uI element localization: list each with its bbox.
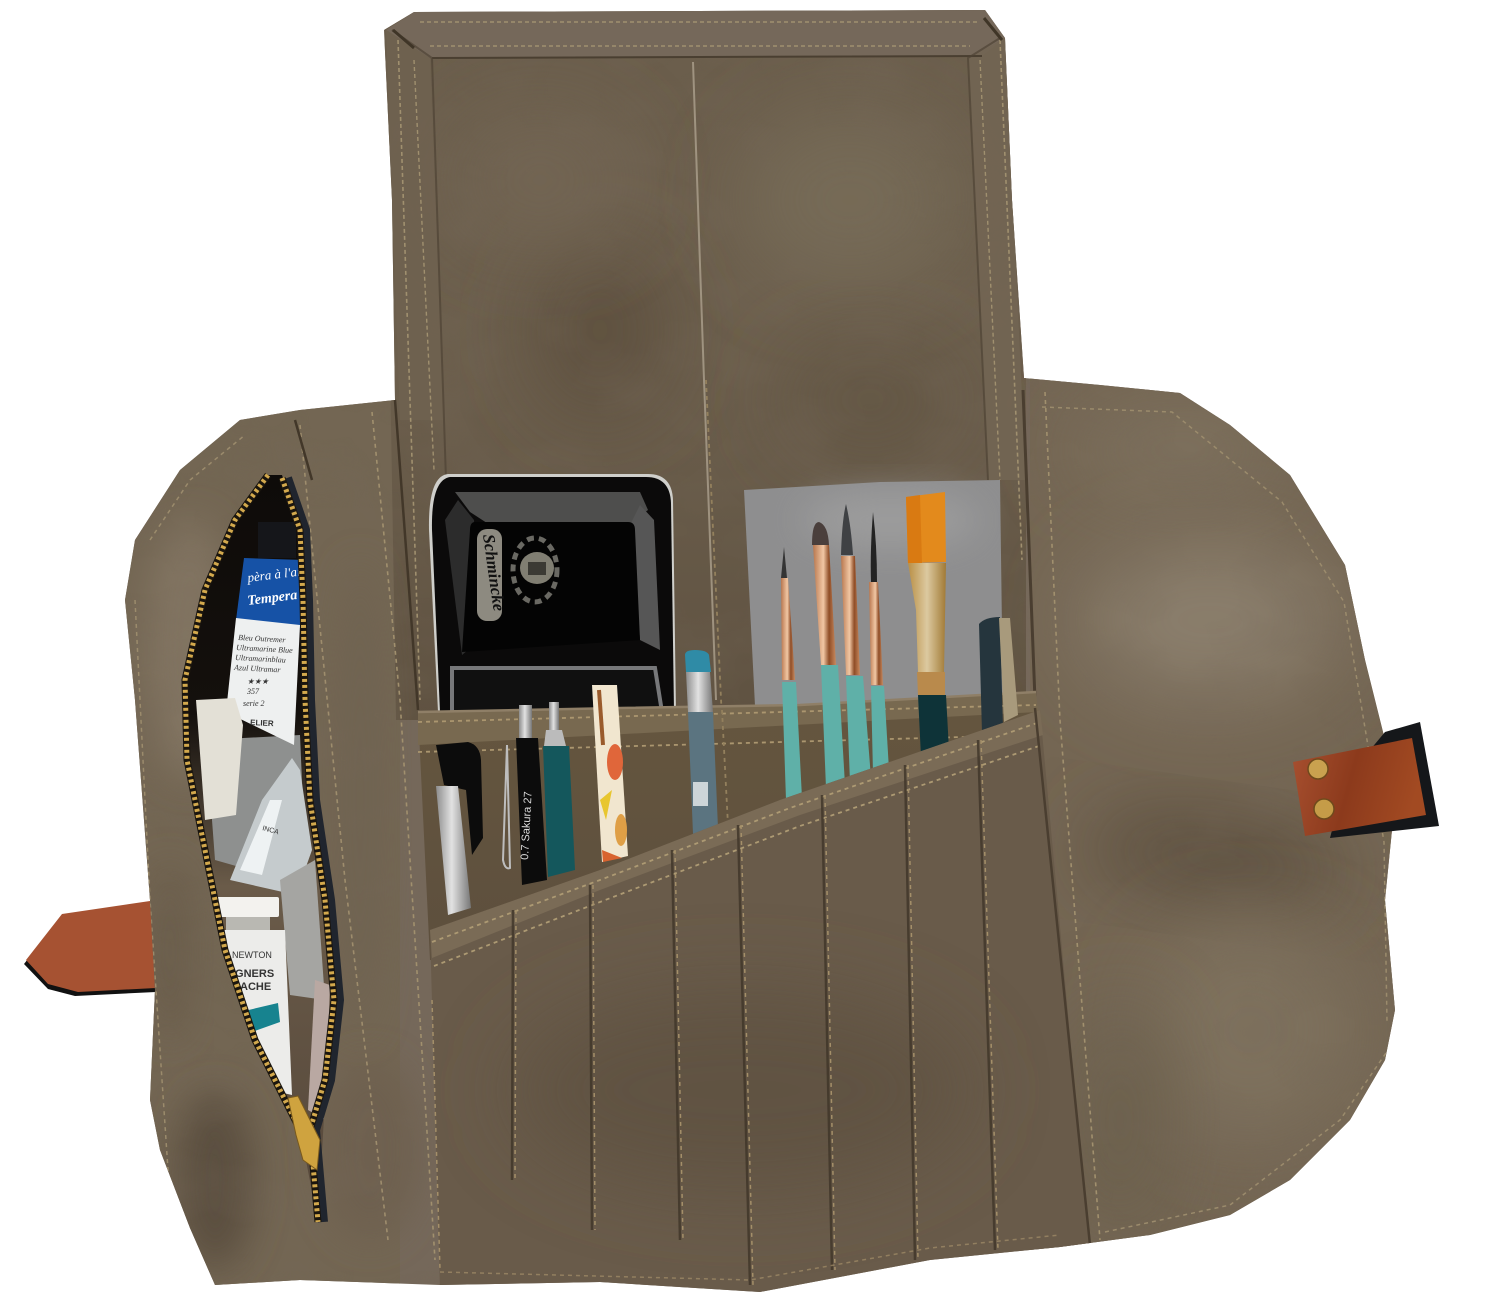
floral patterned pencil [592, 685, 628, 862]
canvas light and dark mottling [145, 110, 1360, 1270]
panel: right wing [1030, 375, 1400, 1260]
back pocket [418, 692, 1042, 960]
brush 3 [841, 504, 871, 783]
gold teeth left [185, 475, 300, 1130]
right leather strap with black backing [1293, 722, 1439, 838]
paint tube: ultramarine: Ultramarinblau [235, 653, 286, 665]
zipper pocket [185, 475, 339, 1222]
Schmincke label: Schmincke [479, 533, 509, 613]
pocket divider stitching [432, 740, 998, 1285]
bottom hem [440, 1235, 1060, 1280]
grey pencil with teal eraser [685, 650, 718, 834]
zipper teeth left [185, 475, 300, 1130]
wing seams [135, 390, 1388, 1260]
silver pen with black clip [436, 742, 483, 915]
brass rivet top [1308, 759, 1328, 779]
pocket interior [185, 475, 334, 1222]
paint tube: ultramarine: Bleu Outremer [238, 633, 287, 645]
tin lid bevel [455, 492, 648, 525]
brush 2 [812, 522, 845, 788]
sketchbook sheet [744, 480, 1003, 706]
paint tube: ultramarine: Ultramarine Blue [236, 643, 293, 655]
mechanical pencil: 0.7 Sakura 27 [519, 791, 535, 860]
paint tube: ultramarine: Tempera [247, 588, 298, 609]
paint tube: ultramarine: Azul Ultramar [233, 663, 282, 674]
left leather strap [24, 901, 156, 996]
paint tube: ultramarine: ELIER [250, 718, 274, 728]
tin crest emblem [513, 538, 557, 602]
front diagonal pocket [430, 708, 1090, 1295]
mechanical pencil [503, 705, 547, 885]
tin raised lid [462, 522, 640, 652]
pocket divider seams [512, 740, 995, 1285]
paint tube: ultramarine [226, 522, 304, 745]
paint tube: ultramarine: pèra à l'ai [246, 564, 302, 585]
panel: top flap [384, 10, 1026, 720]
centre stitching [706, 380, 722, 720]
pocket hem [430, 710, 1043, 958]
zipper slider [288, 1096, 320, 1170]
pocket right edge [1035, 708, 1090, 1245]
pocket contents [196, 522, 330, 1120]
white eraser [196, 698, 243, 820]
brass rivet bottom [1314, 799, 1334, 819]
paint tube: designers gouache [217, 897, 292, 1095]
pocket shading [583, 1044, 897, 1136]
watercolor tin [429, 474, 676, 712]
zipper tape right [287, 478, 339, 1222]
fountain pen [979, 617, 1018, 733]
paint tube: ultramarine: ★★★ [247, 677, 269, 686]
paint tube: designers gouache: IGNERS [232, 968, 274, 980]
gold teeth right [282, 478, 334, 1222]
paint tube: ultramarine: 357 [246, 687, 260, 696]
crumpled foil packet: INCA [261, 825, 280, 836]
top flap hem and edges [386, 10, 1026, 700]
panel: left wing [120, 400, 400, 1300]
paint tube: designers gouache: ACHE [240, 981, 271, 993]
tin lower well [452, 668, 662, 712]
brush 1 [781, 547, 802, 800]
grey foil tube [212, 735, 302, 866]
sketchbook highlight [800, 492, 980, 548]
brush 4 [869, 512, 889, 774]
crumpled foil packet [230, 758, 312, 895]
right foil sliver [280, 860, 325, 1000]
paint tube: ultramarine: serie 2 [243, 699, 265, 708]
zipper teeth right [282, 478, 334, 1222]
flat brush [906, 492, 949, 757]
green pencil [543, 702, 575, 877]
flap centre crease [693, 62, 716, 700]
paint tube: designers gouache: NEWTON [232, 950, 272, 960]
